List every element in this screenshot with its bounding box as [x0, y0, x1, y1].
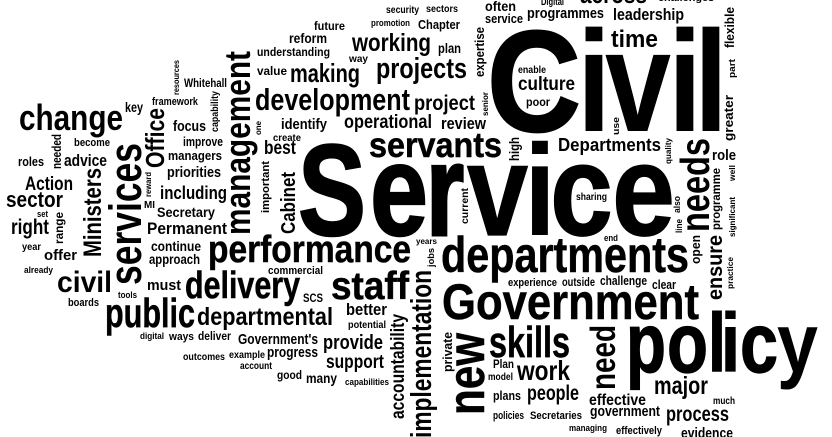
word: Plan: Plan [493, 357, 514, 371]
word: capabilities: capabilities [345, 377, 389, 387]
word: sector: sector [6, 187, 63, 212]
word: Government: Government [442, 274, 699, 330]
word: effectively: effectively [616, 425, 663, 437]
vertical word: jobs: jobs [426, 248, 436, 268]
word: leadership: leadership [613, 5, 684, 24]
word: offer: offer [44, 247, 77, 264]
word: already: already [24, 265, 53, 275]
word: experience: experience [508, 277, 557, 289]
word: way: way [348, 54, 368, 65]
word: Service: e [370, 117, 428, 263]
word: operational: operational [344, 112, 432, 133]
vertical word: well: well [728, 165, 737, 182]
word: policy [626, 296, 818, 390]
word: process: process [666, 403, 729, 426]
word: Civil [487, 1, 728, 162]
word: including: including [160, 183, 227, 203]
word: policy: y [777, 296, 818, 390]
word: Service: r [426, 117, 464, 263]
word: years: years [416, 237, 438, 246]
word: effective: effective [589, 392, 646, 409]
vertical word: significant: significant [728, 197, 737, 237]
word: Service [298, 117, 675, 263]
vertical word: resources: resources [172, 59, 181, 95]
vertical word: needs: needs [672, 138, 718, 232]
word: create: create [273, 133, 301, 144]
word: framework: framework [152, 96, 199, 108]
word: Government's: Government's [238, 331, 318, 348]
word: progress: progress [267, 344, 318, 361]
vertical word: senior: senior [481, 92, 490, 116]
word: SCS: SCS [303, 291, 323, 305]
word: focus: focus [173, 118, 206, 135]
word: enable: enable [518, 65, 546, 76]
word: clear: clear [652, 277, 676, 292]
word: plan: plan [438, 40, 461, 56]
vertical word: ensure: ensure [704, 235, 727, 300]
word: change: change [19, 97, 123, 138]
word: servants: servants [369, 126, 502, 165]
word: MI: MI [144, 200, 155, 211]
word: tools: tools [118, 290, 137, 300]
word: advice: advice [64, 151, 107, 170]
vertical word: need: need [584, 325, 623, 390]
word: role: role [712, 147, 736, 164]
vertical word: capability: capability [210, 91, 221, 132]
word: poor: poor [526, 95, 550, 109]
word: service: service [485, 11, 523, 26]
word: Civil: i [577, 1, 611, 162]
word: priorities: priorities [167, 164, 221, 181]
word: much: much [713, 396, 735, 407]
word: major: major [654, 372, 708, 400]
word: Secretaries: Secretaries [530, 410, 582, 422]
word: outcomes: outcomes [183, 352, 225, 363]
word: managing: managing [569, 423, 607, 433]
word: policy: p [626, 296, 666, 390]
word: policy: c [740, 296, 778, 390]
word: account: account [240, 361, 273, 372]
word: value: value [257, 64, 287, 78]
word: continue: continue [151, 238, 201, 254]
word: model: model [488, 372, 513, 383]
vertical word: one: one [254, 120, 263, 135]
word: identify: identify [281, 116, 328, 133]
word: Chapter: Chapter [418, 17, 460, 32]
vertical word: flexible: flexible [722, 7, 737, 48]
word: policies: policies [493, 410, 524, 422]
vertical word: expertise: expertise [472, 27, 487, 77]
vertical word: new: new [438, 333, 496, 415]
word: potential: potential [348, 320, 386, 331]
word: managers: managers [168, 148, 222, 163]
word: deliver: deliver [198, 329, 231, 343]
word: development: development [255, 82, 410, 117]
word: programmes: programmes [527, 5, 604, 22]
word: working: working [351, 29, 431, 57]
vertical word: implementation: implementation [406, 270, 438, 437]
word: policy: i [720, 296, 741, 390]
word: promotion: promotion [371, 18, 410, 28]
word: plans: plans [493, 388, 521, 403]
word: work: work [516, 355, 570, 386]
word: Service: i [524, 117, 556, 263]
vertical word: reward: reward [144, 172, 153, 197]
word: improve: improve [183, 134, 223, 149]
vertical word: management: management [217, 51, 258, 235]
word: making: making [290, 58, 360, 88]
word: Service: c [550, 117, 613, 263]
word: must: must [147, 277, 181, 294]
vertical word: programme: programme [709, 168, 723, 230]
word: departmental: departmental [197, 303, 333, 331]
vertical word: practice: practice [726, 256, 735, 289]
word: example: example [229, 350, 265, 361]
vertical word: Office: Office [140, 108, 170, 168]
word: Service: v [467, 117, 528, 263]
word: performance: performance [208, 229, 411, 271]
word: become: become [74, 137, 110, 149]
word: Service: S [298, 117, 366, 263]
word: ways: ways [168, 331, 194, 343]
word: better: better [346, 300, 387, 319]
word: sectors: sectors [426, 4, 458, 15]
word: project: project [414, 92, 475, 115]
word: good: good [277, 368, 302, 382]
word: commercial: commercial [268, 265, 323, 277]
word: support: support [326, 352, 385, 373]
word: Permanent: Permanent [147, 219, 227, 238]
word: culture: culture [518, 74, 575, 95]
word: digital: digital [140, 331, 164, 341]
word: staff: staff [331, 265, 410, 308]
word: Civil: v [605, 1, 671, 162]
word: boards: boards [68, 297, 99, 309]
vertical word: current: current [460, 187, 471, 224]
vertical word: open: open [688, 235, 703, 264]
vertical word: services: services [100, 143, 151, 285]
word: reform: reform [289, 30, 327, 46]
word: best: best [264, 138, 297, 159]
word: future: future [314, 19, 345, 33]
vertical word: use: use [611, 117, 621, 135]
word: projects: projects [376, 53, 467, 85]
vertical word: quality: quality [664, 137, 673, 164]
word: public: public [105, 290, 195, 336]
vertical word: private: private [440, 332, 455, 372]
vertical word: accountability: accountability [388, 314, 409, 419]
word: Civil: C [487, 1, 581, 162]
word: outside: outside [562, 275, 595, 289]
vertical word: also: also [672, 196, 682, 213]
word: policy: o [667, 296, 708, 390]
word: year: year [22, 242, 41, 253]
word: sharing: sharing [576, 192, 607, 203]
vertical word: Ministers: Ministers [79, 168, 107, 257]
word: delivery: delivery [185, 265, 300, 307]
vertical word: important: important [260, 161, 272, 213]
word: understanding: understanding [257, 45, 330, 59]
word: provide: provide [323, 332, 383, 354]
word: departments: departments [441, 227, 689, 283]
word: civil: civil [57, 266, 112, 299]
word: Civil: l [694, 1, 728, 162]
vertical word: needed: needed [49, 134, 64, 169]
word: many: many [306, 370, 337, 386]
word: challenge: challenge [600, 273, 647, 288]
word: Service: e [612, 117, 675, 263]
word: Action: Action [25, 174, 73, 195]
vertical word: Cabinet: Cabinet [278, 172, 300, 234]
word: approach: approach [149, 251, 200, 267]
word: skills: skills [489, 318, 570, 367]
vertical word: line: line [674, 219, 684, 233]
vertical word: greater: greater [721, 95, 736, 141]
word: time: time [611, 26, 658, 53]
word: Civil: i [668, 1, 702, 162]
word: policy: l [707, 296, 727, 390]
word: people: people [527, 382, 579, 405]
word: Secretary: Secretary [157, 204, 215, 220]
vertical word: part: part [727, 59, 737, 78]
word: key: key [125, 99, 143, 115]
word: security: security [386, 5, 419, 16]
word: end: end [604, 233, 618, 243]
word: review: review [441, 114, 487, 133]
word: right: right [11, 216, 49, 239]
vertical word: high: high [506, 137, 522, 161]
vertical word: range: range [52, 212, 66, 244]
word: roles: roles [18, 154, 44, 169]
word: Whitehall: Whitehall [184, 76, 227, 90]
word: government: government [590, 403, 660, 420]
word: Departments: Departments [558, 135, 661, 155]
word: set: set [37, 209, 48, 219]
